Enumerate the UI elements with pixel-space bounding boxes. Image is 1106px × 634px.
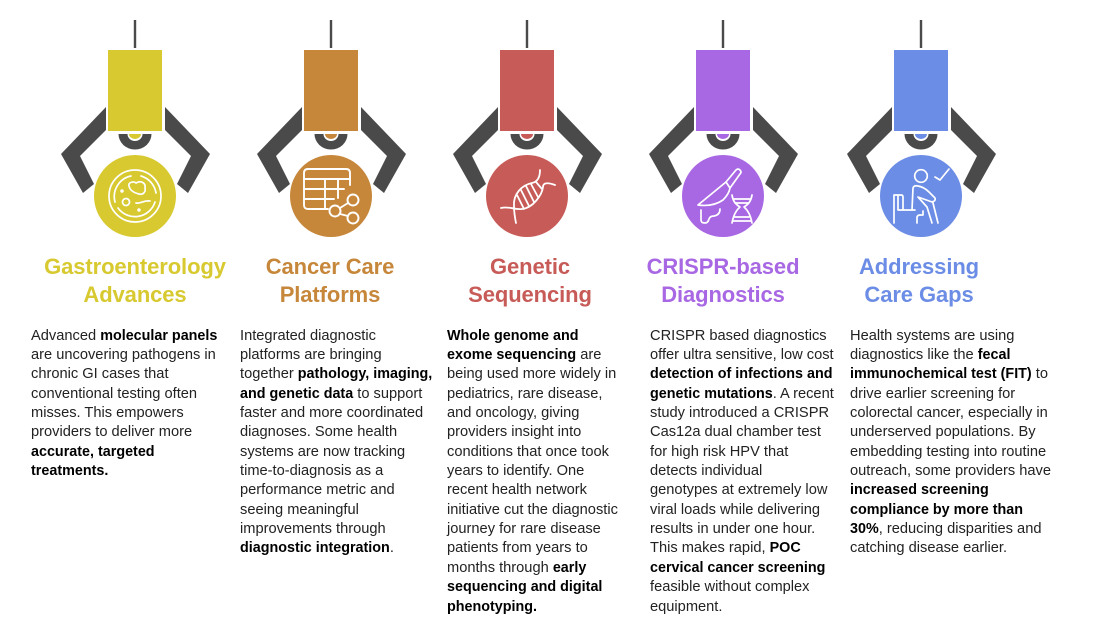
heading: CRISPR-based Diagnostics: [647, 254, 799, 307]
text: cancer care description: [240, 328, 432, 556]
text: genetic sequencing description: conditions that once took: [447, 444, 609, 460]
text: genetic sequencing description: Whole genome and: [447, 328, 578, 344]
text: care gaps description: drive earlier screening for: [850, 386, 1015, 402]
text: gastroenterology description: [31, 328, 217, 479]
text: care gaps description: underserved populations. By: [850, 424, 1036, 440]
text: gastroenterology description: Advanced molecular panels: [31, 328, 217, 344]
text: care gaps description: [850, 328, 1051, 556]
text: genetic sequencing description: months through early: [447, 560, 586, 576]
text: cancer care description: systems are now tracking: [240, 444, 405, 460]
icon: scalpel and DNA: [698, 169, 752, 223]
text: care gaps description: Health systems are using: [850, 328, 1014, 344]
icon: DNA helix: [501, 170, 555, 223]
text: care gaps description: immunochemical test (FIT) to: [850, 366, 1048, 382]
text: gastroenterology description: providers to deliver more: [31, 424, 192, 440]
text: genetic sequencing description: initiative cut the diagnostic: [447, 502, 618, 518]
heading: CRISPR-based Diagnostics: Diagnostics: [661, 282, 785, 307]
text: gastroenterology description: misses. This empowers: [31, 405, 184, 421]
text: cancer care description: diagnostic integration.: [240, 540, 394, 556]
text: CRISPR description: equipment.: [650, 599, 722, 615]
text: cancer care description: platforms are bringing: [240, 347, 382, 363]
text: CRISPR description: CRISPR based diagnostics: [650, 328, 827, 344]
text: cancer care description: time-to-diagnosis as a: [240, 463, 383, 479]
text: genetic sequencing description: patients from years to: [447, 540, 588, 556]
text: CRISPR description: results in under one hour.: [650, 521, 815, 537]
heading: Addressing Care Gaps: Care Gaps: [864, 282, 974, 307]
text: CRISPR description: Cas12a dual chamber test: [650, 424, 821, 440]
text: genetic sequencing description: being used more widely in: [447, 366, 616, 382]
text: cancer care description: diagnoses. Some health: [240, 424, 397, 440]
heading: Gastroenterology Advances: Advances: [83, 282, 187, 307]
text: genetic sequencing description: phenotyping.: [447, 599, 537, 615]
text: CRISPR description: genotypes at extremely low: [650, 482, 827, 498]
text: CRISPR description: for high risk HPV that: [650, 444, 788, 460]
text: CRISPR description: viral loads while delivering: [650, 502, 820, 518]
text: CRISPR description: feasible without complex: [650, 579, 810, 595]
text: cancer care description: performance metric and: [240, 482, 395, 498]
text: CRISPR description: [650, 328, 834, 615]
text: cancer care description: seeing meaningful: [240, 502, 359, 518]
heading: Cancer Care Platforms: Platforms: [280, 282, 380, 307]
text: gastroenterology description: are uncovering pathogens in: [31, 347, 216, 363]
text: care gaps description: embedding testing into routine: [850, 444, 1046, 460]
text: gastroenterology description: chronic GI cases that: [31, 366, 169, 382]
text: cancer care description: and genetic data to support: [240, 386, 422, 402]
text: care gaps description: colorectal cancer, especially in: [850, 405, 1048, 421]
heading: Gastroenterology Advances: [44, 254, 226, 307]
text: CRISPR description: detection of infections and: [650, 366, 832, 382]
text: care gaps description: increased screening: [850, 482, 989, 498]
text: genetic sequencing description: recent health network: [447, 482, 587, 498]
text: cancer care description: improvements through: [240, 521, 386, 537]
heading: CRISPR-based Diagnostics: CRISPR-based: [647, 254, 799, 279]
text: care gaps description: compliance by more than: [850, 502, 1023, 518]
icon: seated person with check: [894, 169, 949, 223]
heading: Cancer Care Platforms: [266, 254, 394, 307]
text: genetic sequencing description: and oncology, giving: [447, 405, 579, 421]
heading: Cancer Care Platforms: Cancer Care: [266, 254, 394, 279]
text: CRISPR description: This makes rapid, POC: [650, 540, 801, 556]
text: gastroenterology description: conventional testing often: [31, 386, 197, 402]
heading: Addressing Care Gaps: [859, 254, 979, 307]
text: genetic sequencing description: sequencing and digital: [447, 579, 602, 595]
text: CRISPR description: detects individual: [650, 463, 762, 479]
text: care gaps description: outreach, some providers have: [850, 463, 1051, 479]
text: care gaps description: 30%, reducing disparities and: [850, 521, 1042, 537]
text: genetic sequencing description: providers insight into: [447, 424, 581, 440]
claw: CRISPR: [649, 20, 798, 237]
text: cancer care description: together pathology, imaging,: [240, 366, 432, 382]
icon: petri dish: [109, 170, 161, 222]
text: CRISPR description: offer ultra sensitive, low cost: [650, 347, 834, 363]
text: CRISPR description: cervical cancer screening: [650, 560, 825, 576]
text: gastroenterology description: accurate, targeted: [31, 444, 155, 460]
claw: care gaps: [847, 20, 996, 237]
text: CRISPR description: study introduced a CRISPR: [650, 405, 829, 421]
heading: Addressing Care Gaps: Addressing: [859, 254, 979, 279]
text: genetic sequencing description: [446, 328, 618, 615]
text: genetic sequencing description: pediatrics, rare disease,: [447, 386, 602, 402]
text: cancer care description: faster and more coordinated: [240, 405, 423, 421]
text: genetic sequencing description: journey for rare disease: [447, 521, 601, 537]
heading: Gastroenterology Advances: Gastroenterology: [44, 254, 226, 279]
claw: cancer care: [257, 20, 406, 237]
icon: table with share nodes: [304, 169, 358, 224]
heading: Genetic Sequencing: Sequencing: [468, 282, 592, 307]
text: CRISPR description: genetic mutations. A recent: [650, 386, 834, 402]
claw: gastroenterology: [61, 20, 210, 237]
text: genetic sequencing description: years to identify. One: [447, 463, 584, 479]
text: genetic sequencing description: exome sequencing are: [447, 347, 601, 363]
text: care gaps description: diagnostics like the fecal: [850, 347, 1010, 363]
heading: Genetic Sequencing: [468, 254, 592, 307]
heading: Genetic Sequencing: Genetic: [490, 254, 570, 279]
text: gastroenterology description: treatments.: [31, 463, 108, 479]
text: cancer care description: Integrated diagnostic: [240, 328, 376, 344]
claw: genetic sequencing: [453, 20, 602, 237]
text: care gaps description: catching disease earlier.: [850, 540, 1007, 556]
